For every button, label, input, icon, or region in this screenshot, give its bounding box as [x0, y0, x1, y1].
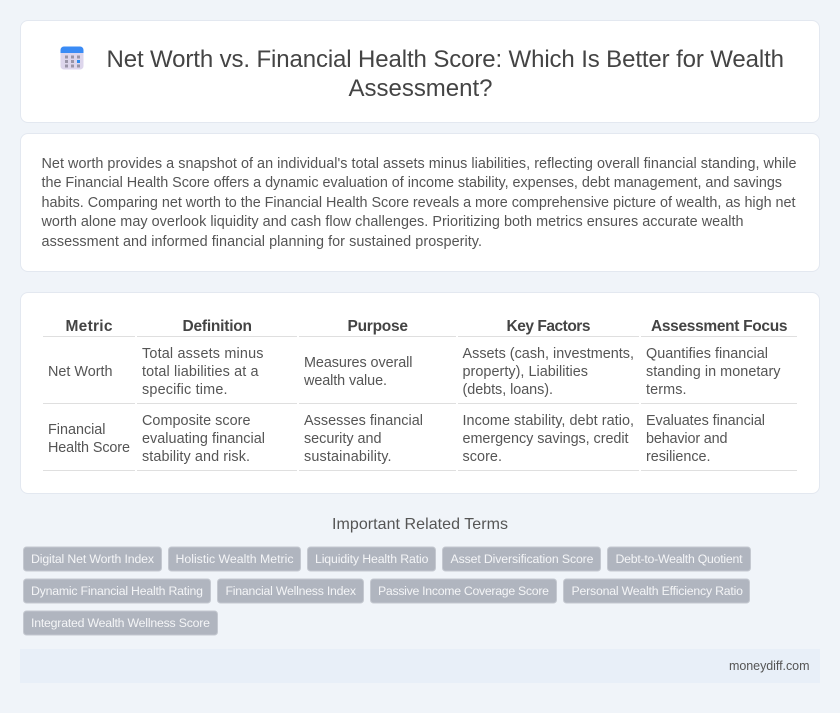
table header row: Purpose [348, 318, 408, 335]
tag: Liquidity Health Ratio: Liquidity Health Ratio [315, 552, 429, 566]
text block: summary paragraph: habits. Comparing net worth to the Financial Health Score reveals a more comprehensive picture of wealth, as high net [42, 195, 796, 211]
tag: Financial Wellness Index [218, 579, 364, 603]
table row: Financial Health Score: Composite score [142, 413, 250, 429]
text block: summary paragraph: worth alone may overlook liquidity and cash flow challenges. Prioritizing both metrics ensures accurate wealth [40, 214, 744, 230]
table row: Net Worth: Net Worth [48, 364, 112, 380]
text block: summary paragraph: Net worth provides a snapshot of an individual's total assets minus liabilities, reflecting overall financial standing, while [42, 156, 796, 172]
tag: Digital Net Worth Index [24, 547, 162, 571]
table row: Financial Health Score: Assesses financial [304, 413, 423, 429]
table row: Net Worth [48, 346, 781, 398]
tag: Integrated Wealth Wellness Score [24, 611, 218, 635]
table row: Financial Health Score: sustainability. [304, 449, 392, 465]
table row: Net Worth: total liabilities at a [142, 364, 258, 380]
table header row: Definition [182, 318, 252, 335]
tag: Debt-to-Wealth Quotient [608, 547, 750, 571]
table row: Financial Health Score: evaluating financial [142, 431, 265, 447]
tag: Passive Income Coverage Score [370, 579, 556, 603]
table row: Financial Health Score: stability and risk. [142, 449, 250, 465]
title [106, 46, 784, 102]
footer bar [20, 649, 820, 683]
table row: Net Worth: (debts, loans). [462, 382, 553, 398]
tag: Personal Wealth Efficiency Ratio [564, 579, 750, 603]
table row: Financial Health Score [48, 413, 765, 465]
text block: summary paragraph: the Financial Health Score offers a dynamic evaluation of income stability, expenses, debt management, and savings [42, 175, 782, 191]
table row: Financial Health Score: emergency savings, credit [462, 431, 628, 447]
table row: Financial Health Score: resilience. [646, 449, 710, 465]
tags: related terms [24, 547, 750, 635]
tag: Financial Wellness Index: Financial Wellness Index [226, 584, 357, 598]
table row: Financial Health Score: Financial [48, 422, 106, 438]
table header row: Key Factors [506, 318, 590, 335]
table row: Net Worth: standing in monetary [646, 364, 781, 380]
table row: Financial Health Score: Evaluates financial [646, 413, 765, 429]
table header row: Assessment Focus [651, 318, 788, 335]
table row: Net Worth: Total assets minus [142, 346, 264, 362]
table row: Financial Health Score: behavior and [646, 431, 728, 447]
tag: Dynamic Financial Health Rating: Dynamic Financial Health Rating [31, 584, 203, 598]
footer source label: moneydiff.com [729, 659, 810, 673]
tag: Asset Diversification Score [442, 547, 600, 571]
table header row: Metric [66, 318, 113, 335]
icon: calendar [60, 46, 84, 70]
table row: Net Worth: terms. [646, 382, 686, 398]
panel: comparison table [20, 292, 820, 494]
title: Net Worth vs. Financial Health Score: Which Is Better for Wealth [106, 46, 784, 73]
heading: important related terms: Important Related Terms [332, 516, 508, 533]
tag: Debt-to-Wealth Quotient: Debt-to-Wealth Quotient [616, 552, 743, 566]
table row: Net Worth: Assets (cash, investments, [462, 346, 634, 362]
table row: Net Worth: Quantifies financial [646, 346, 768, 362]
tag: Personal Wealth Efficiency Ratio: Personal Wealth Efficiency Ratio [572, 584, 743, 598]
table row: Financial Health Score: score. [462, 449, 502, 465]
text block: summary paragraph: assessment and informed financial planning for sustained prosperity. [42, 234, 482, 250]
tag: Holistic Wealth Metric: Holistic Wealth Metric [176, 552, 294, 566]
tag: Passive Income Coverage Score: Passive Income Coverage Score [378, 584, 549, 598]
table header row [66, 318, 788, 335]
table row: Financial Health Score: Income stability, debt ratio, [462, 413, 634, 429]
text block: summary paragraph [40, 156, 796, 250]
table row: Financial Health Score: security and [304, 431, 382, 447]
table row: Net Worth: property), Liabilities [462, 364, 588, 380]
panel: summary [20, 133, 820, 272]
tag: Digital Net Worth Index: Digital Net Worth Index [31, 552, 155, 566]
table: comparison [43, 318, 797, 471]
panel: header [20, 20, 820, 123]
table row: Net Worth: wealth value. [303, 373, 387, 389]
tag: Dynamic Financial Health Rating [24, 579, 210, 603]
tag: Holistic Wealth Metric [168, 547, 300, 571]
tag: Asset Diversification Score: Asset Diversification Score [450, 552, 594, 566]
tag: Liquidity Health Ratio [308, 547, 436, 571]
title: Assessment? [348, 75, 492, 102]
tag: Integrated Wealth Wellness Score: Integrated Wealth Wellness Score [31, 616, 210, 630]
table row: Financial Health Score: Health Score [48, 440, 130, 456]
table row: Net Worth: Measures overall [304, 355, 412, 371]
table row: Net Worth: specific time. [142, 382, 228, 398]
